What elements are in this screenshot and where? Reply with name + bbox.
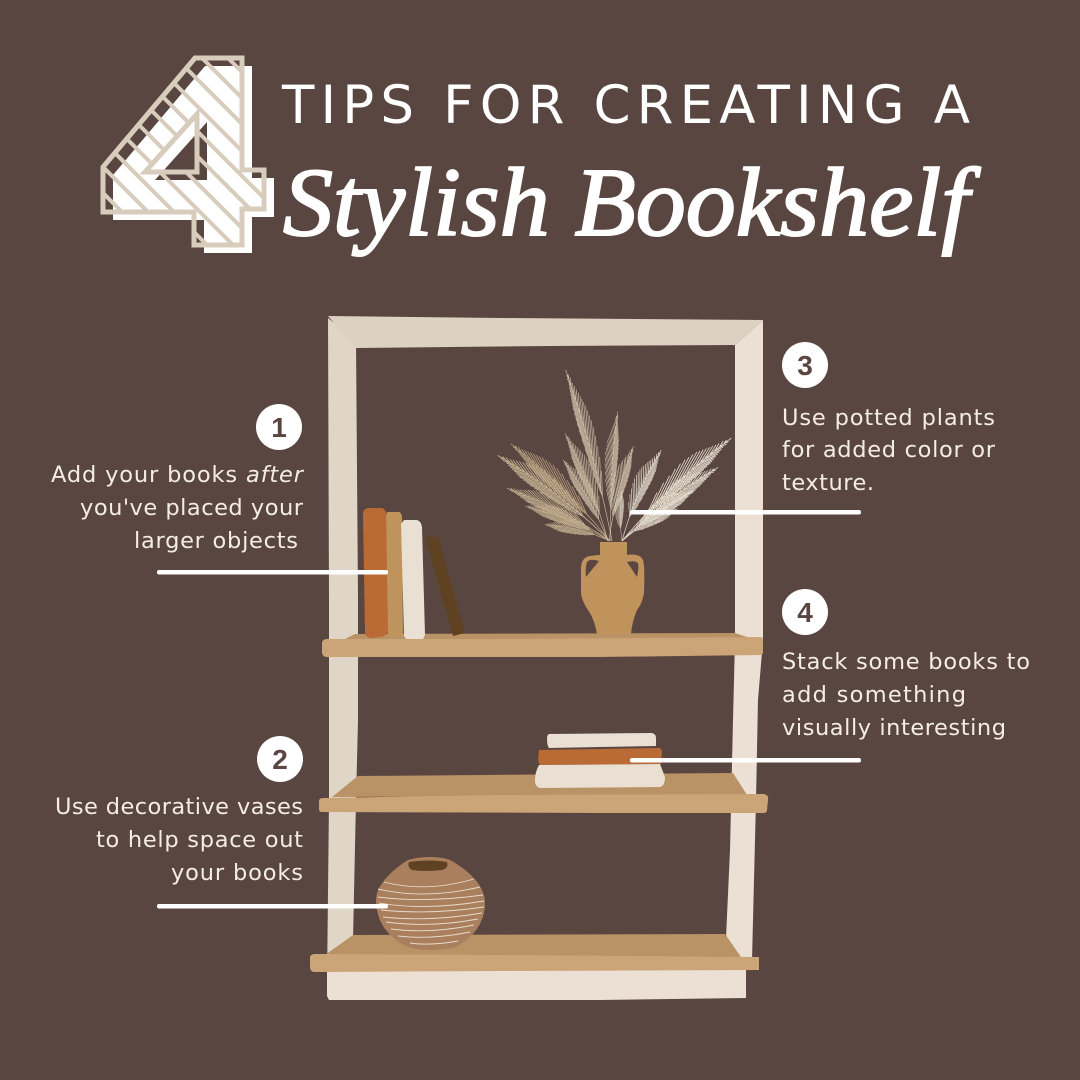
middle book — [538, 748, 662, 765]
bookshelf — [310, 316, 768, 1000]
title line: TIPS FOR CREATING A — [281, 75, 970, 136]
callout 2 text: your books — [171, 860, 303, 886]
callout 1 — [51, 404, 388, 574]
bottom panel — [327, 966, 746, 1000]
leader line 1 — [157, 570, 388, 574]
leader line 3 — [630, 510, 861, 514]
pampas grass — [498, 366, 731, 554]
tan book — [386, 512, 403, 637]
leader line 4 — [630, 758, 861, 762]
callout 3 text — [782, 405, 996, 496]
number badge 2 — [257, 736, 303, 782]
right post — [725, 320, 763, 960]
shelf 2 — [319, 773, 768, 813]
amphora vase — [581, 542, 644, 634]
callout 4 text — [782, 649, 1030, 741]
callout 2 text: to help space out — [96, 827, 303, 853]
callout 2 text — [55, 794, 303, 886]
number badge 1: 1 — [271, 412, 287, 443]
shelf 1 — [322, 633, 763, 657]
number badge 3: 3 — [797, 350, 813, 381]
left post — [327, 318, 358, 985]
number badge 1 — [256, 404, 302, 450]
callout 1 text: Add your books after — [51, 462, 305, 488]
callout 3 text: texture. — [782, 470, 874, 496]
callout 1 text — [51, 462, 305, 554]
top bar — [328, 316, 763, 348]
number badge 4: 4 — [797, 597, 813, 628]
callout 3 text: for added color or — [782, 437, 996, 463]
dark leaning book — [425, 537, 465, 636]
white book — [401, 520, 425, 639]
callout 3 text: Use potted plants — [782, 405, 995, 431]
upright books — [363, 508, 465, 639]
shelf 3 — [310, 934, 759, 972]
number badge 4 — [782, 589, 828, 635]
callout 1 text: larger objects — [134, 528, 298, 554]
number badge 3 — [782, 342, 828, 388]
callout 4 — [630, 589, 1030, 762]
leader line 2 — [157, 904, 388, 908]
script title: Stylish Bookshelf — [283, 149, 981, 257]
callout 2 text: Use decorative vases — [55, 794, 303, 820]
callout 3 — [630, 342, 996, 514]
callout 2 — [55, 736, 388, 908]
icon: striped number 4 — [100, 56, 274, 253]
bottom book — [535, 764, 665, 788]
top book — [547, 733, 656, 748]
orange book — [363, 508, 388, 638]
round striped vase — [376, 857, 485, 950]
callout 4 text: add something — [782, 682, 966, 708]
callout 1 text: you've placed your — [80, 495, 304, 521]
stacked books — [535, 733, 665, 788]
callout 4 text: Stack some books to — [782, 649, 1030, 675]
callout 4 text: visually interesting — [782, 715, 1006, 741]
number badge 2: 2 — [272, 744, 288, 775]
